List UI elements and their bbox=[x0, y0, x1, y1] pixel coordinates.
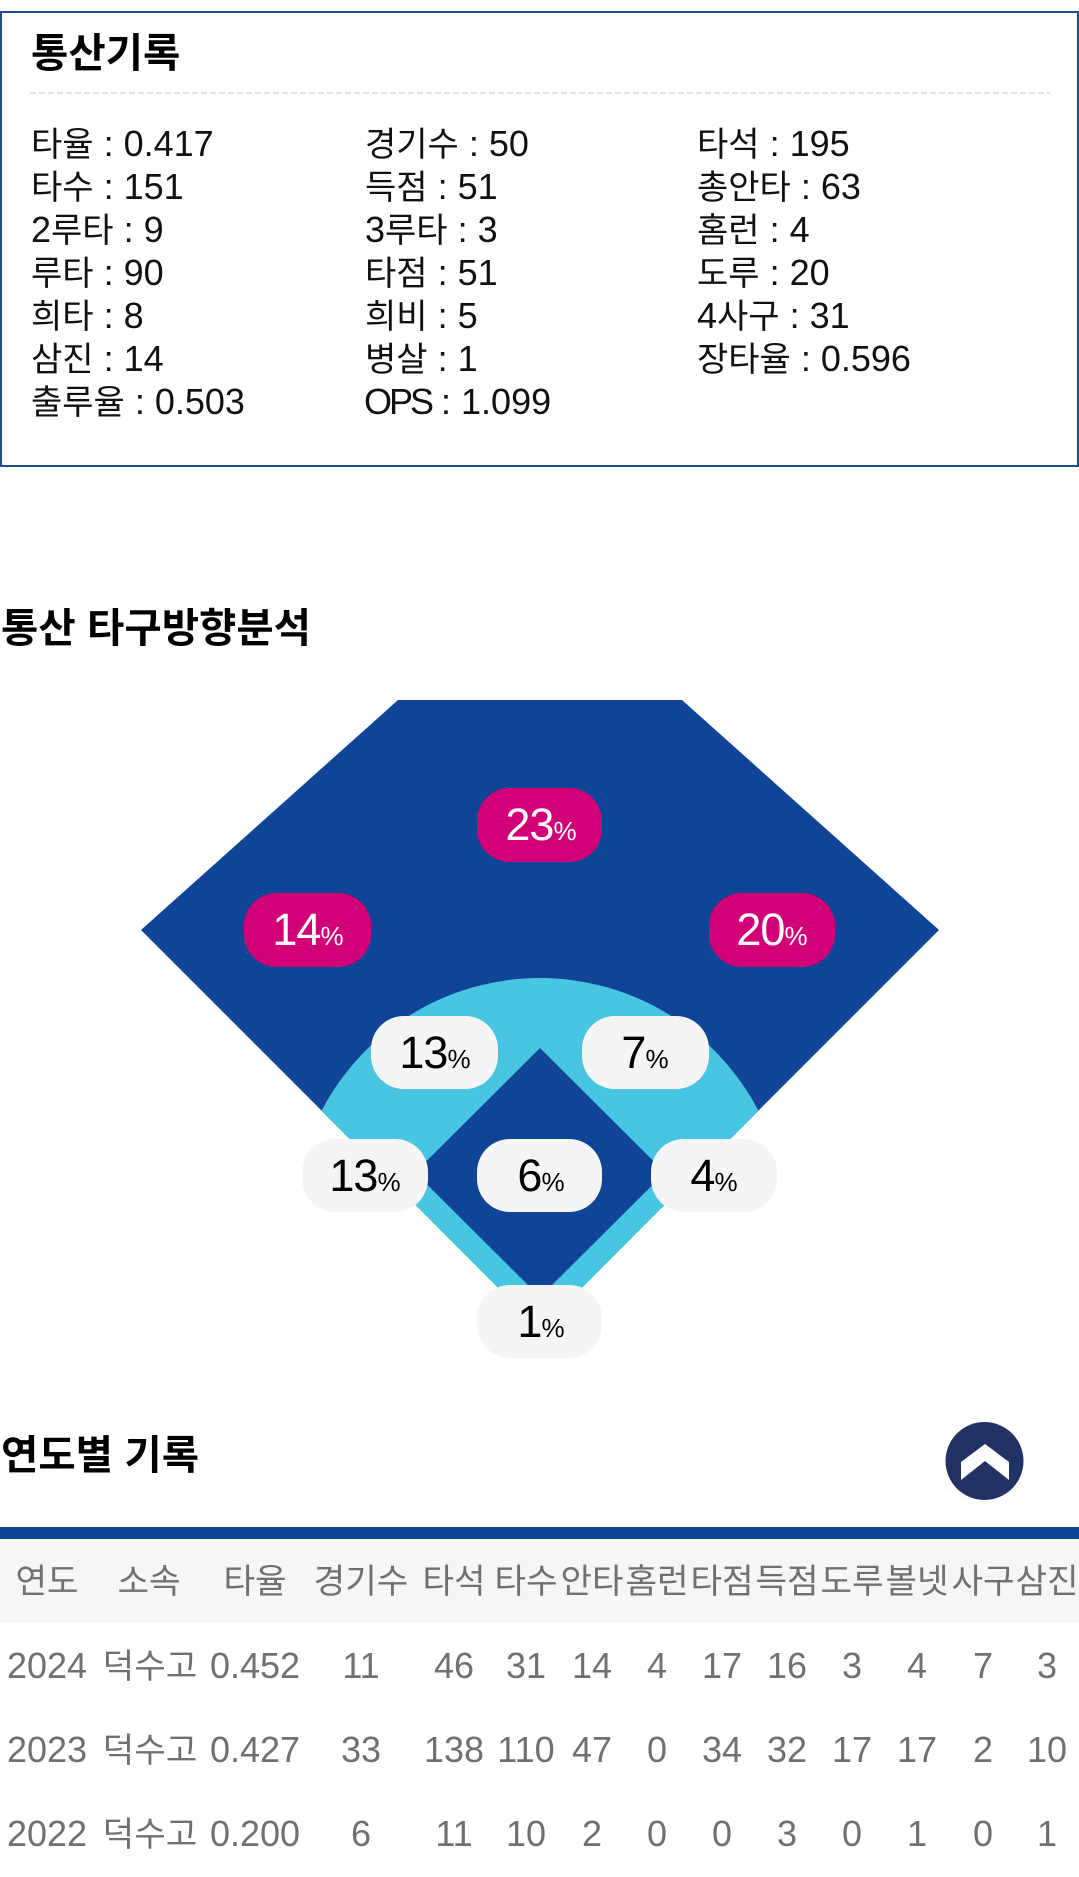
row 2024 bbox=[7, 1638, 1057, 1688]
pill: shortstop 13%: 13% bbox=[399, 1027, 471, 1078]
outfield bbox=[141, 700, 939, 1329]
row 2023 bbox=[7, 1722, 1067, 1772]
pill: third base 13%: 13% bbox=[329, 1150, 401, 1201]
stats column 1: 출루율 : 0.503 bbox=[31, 375, 245, 424]
stats column 1: 삼진 : 14 bbox=[31, 332, 164, 381]
infield arc bbox=[322, 978, 758, 1330]
panel: career stats bbox=[1, 12, 1078, 466]
stats column 2: 경기수 : 50 bbox=[365, 117, 529, 166]
row 2022: 3 bbox=[777, 1813, 797, 1854]
pill: third base 13% bbox=[302, 1139, 428, 1212]
row 2024: 31 bbox=[506, 1645, 546, 1686]
table header: 사구 bbox=[951, 1553, 1015, 1603]
stats column 2 bbox=[364, 117, 551, 422]
row 2023: 덕수고 bbox=[103, 1722, 197, 1772]
stats column 2: 득점 : 51 bbox=[365, 160, 498, 209]
row 2024: 16 bbox=[767, 1645, 807, 1686]
stats column 2: 타점 : 51 bbox=[365, 246, 498, 295]
pill: first base 4% bbox=[651, 1139, 777, 1212]
row 2023: 17 bbox=[897, 1729, 937, 1770]
heading: career stats: 통산기록 bbox=[31, 20, 180, 79]
row 2023: 32 bbox=[767, 1729, 807, 1770]
stats column 2: OPS : 1.099 bbox=[364, 381, 551, 422]
pill: first base 4%: 4% bbox=[690, 1150, 738, 1201]
pill: right field 20%: 20% bbox=[736, 904, 808, 955]
row 2022: 10 bbox=[506, 1813, 546, 1854]
row 2022: 0.200 bbox=[210, 1813, 300, 1854]
pill: left field 14%: 14% bbox=[272, 904, 344, 955]
table header: 홈런 bbox=[625, 1553, 689, 1603]
pill: shortstop 13% bbox=[371, 1016, 498, 1089]
row 2024: 7 bbox=[973, 1645, 993, 1686]
pill: center field 23%: 23% bbox=[505, 799, 577, 850]
stats column 3: 홈런 : 4 bbox=[697, 203, 810, 252]
row 2024: 4 bbox=[647, 1645, 667, 1686]
row 2024: 덕수고 bbox=[103, 1638, 197, 1688]
row 2023: 47 bbox=[572, 1729, 612, 1770]
pill: catcher 1%: 1% bbox=[517, 1296, 565, 1347]
row 2024: 4 bbox=[907, 1645, 927, 1686]
row 2023: 17 bbox=[832, 1729, 872, 1770]
pill: second base 7% bbox=[582, 1016, 709, 1089]
pill: left field 14% bbox=[244, 893, 371, 967]
row 2022: 0 bbox=[842, 1813, 862, 1854]
row 2022: 6 bbox=[351, 1813, 371, 1854]
row 2024: 46 bbox=[434, 1645, 474, 1686]
stats column 3 bbox=[697, 117, 911, 381]
stats column 2: 희비 : 5 bbox=[365, 289, 478, 338]
row 2023: 0 bbox=[647, 1729, 667, 1770]
row 2024: 14 bbox=[572, 1645, 612, 1686]
table header: 경기수 bbox=[314, 1553, 408, 1603]
row 2022: 11 bbox=[435, 1813, 473, 1854]
table header: 타수 bbox=[494, 1553, 558, 1603]
row 2022: 1 bbox=[1037, 1813, 1057, 1854]
table header bbox=[15, 1553, 1079, 1603]
row 2023: 138 bbox=[424, 1729, 484, 1770]
row 2023: 110 bbox=[497, 1729, 555, 1770]
row 2024: 3 bbox=[1037, 1645, 1057, 1686]
row 2022: 2022 bbox=[7, 1813, 87, 1854]
row 2023: 2 bbox=[973, 1729, 993, 1770]
stats column 1: 루타 : 90 bbox=[31, 246, 164, 295]
table: yearly records bbox=[0, 1527, 1079, 1856]
table header: 소속 bbox=[117, 1553, 181, 1603]
row 2022 bbox=[7, 1806, 1057, 1856]
chart: baseball field bbox=[141, 700, 939, 1358]
stats column 2: 병살 : 1 bbox=[365, 332, 478, 381]
row 2022: 덕수고 bbox=[103, 1806, 197, 1856]
table header: 삼진 bbox=[1015, 1553, 1079, 1603]
stats column 3: 장타율 : 0.596 bbox=[697, 332, 911, 381]
pill: center field 23% bbox=[477, 788, 602, 862]
table header: 타점 bbox=[690, 1553, 754, 1603]
heading: yearly records: 연도별 기록 bbox=[1, 1422, 199, 1481]
row 2022: 0 bbox=[647, 1813, 667, 1854]
table header: 볼넷 bbox=[885, 1553, 949, 1603]
row 2022: 2 bbox=[582, 1813, 602, 1854]
row 2023: 34 bbox=[702, 1729, 742, 1770]
stats column 3: 타석 : 195 bbox=[697, 117, 850, 166]
row 2024: 2024 bbox=[7, 1645, 87, 1686]
pill: catcher 1% bbox=[477, 1285, 602, 1358]
pill: second base 7%: 7% bbox=[621, 1027, 669, 1078]
row 2022: 0 bbox=[712, 1813, 732, 1854]
row 2024: 0.452 bbox=[210, 1645, 300, 1686]
table header: 타율 bbox=[223, 1553, 287, 1603]
pill: pitcher 6%: 6% bbox=[517, 1150, 565, 1201]
table header: 타석 bbox=[422, 1553, 486, 1603]
row 2023: 33 bbox=[341, 1729, 381, 1770]
pill: pitcher 6% bbox=[477, 1139, 602, 1212]
row 2022: 1 bbox=[907, 1813, 927, 1854]
pill: right field 20% bbox=[709, 893, 835, 967]
row 2024: 3 bbox=[842, 1645, 862, 1686]
inner diamond bbox=[415, 1048, 665, 1297]
row 2023: 0.427 bbox=[210, 1729, 300, 1770]
stats column 3: 총안타 : 63 bbox=[697, 160, 861, 209]
heading: batted ball direction: 통산 타구방향분석 bbox=[1, 595, 311, 654]
stats column 1: 2루타 : 9 bbox=[31, 203, 164, 252]
stats column 3: 도루 : 20 bbox=[697, 246, 830, 295]
row 2022: 0 bbox=[973, 1813, 993, 1854]
table header: 연도 bbox=[15, 1553, 79, 1603]
stats column 2: 3루타 : 3 bbox=[365, 203, 498, 252]
row 2023: 2023 bbox=[7, 1729, 87, 1770]
stats column 1: 희타 : 8 bbox=[31, 289, 144, 338]
stats column 1: 타율 : 0.417 bbox=[31, 117, 214, 166]
table header: 안타 bbox=[560, 1553, 624, 1603]
row 2023: 10 bbox=[1027, 1729, 1067, 1770]
row 2024: 17 bbox=[702, 1645, 742, 1686]
row 2024: 11 bbox=[342, 1645, 380, 1686]
table header: 도루 bbox=[820, 1553, 884, 1603]
stats column 1: 타수 : 151 bbox=[31, 160, 184, 209]
table header: 득점 bbox=[755, 1553, 819, 1603]
icon: scroll up button bbox=[946, 1422, 1024, 1500]
stats column 1 bbox=[31, 117, 245, 424]
stats column 3: 4사구 : 31 bbox=[697, 289, 850, 338]
